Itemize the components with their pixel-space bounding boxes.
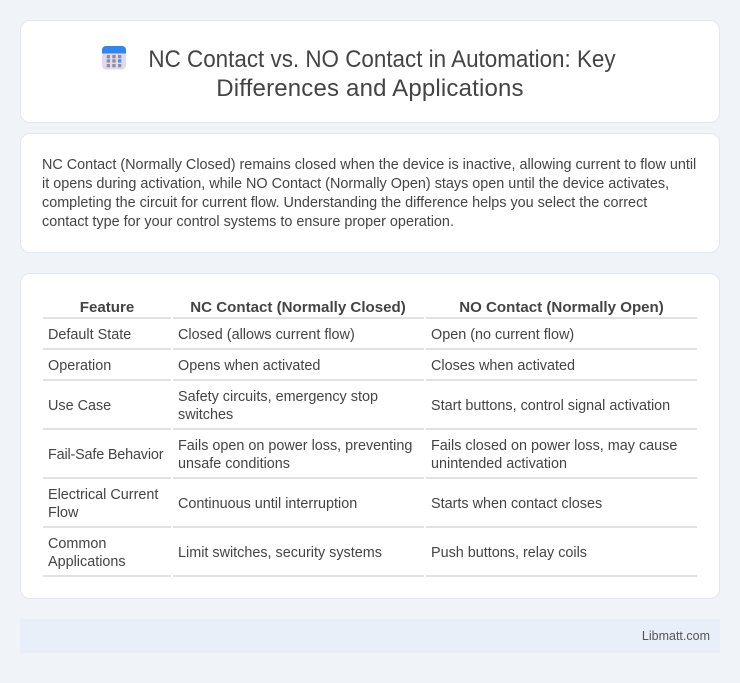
comparison table: Operation <box>48 358 111 374</box>
row: electrical current flow <box>48 487 602 521</box>
intro text: it opens during activation, while NO Contact (Normally Open) stays open until the device activates, <box>42 176 669 192</box>
comparison table: Common <box>48 536 106 552</box>
comparison table: Fail-Safe Behavior <box>48 447 163 463</box>
footer text: Libmatt.com <box>642 629 710 643</box>
intro card <box>20 133 720 253</box>
comparison table: Flow <box>48 505 78 521</box>
comparison table: Safety circuits, emergency stop <box>178 389 378 405</box>
intro text: completing the circuit for current flow. Understanding the difference helps you select the correct <box>42 195 647 211</box>
comparison table: Default State <box>48 327 131 343</box>
comparison table: Feature <box>80 298 134 316</box>
row: operation <box>48 358 575 374</box>
title: NC Contact vs. NO Contact in Automation: Key <box>148 46 615 73</box>
comparison table: Push buttons, relay coils <box>431 545 587 561</box>
row: fail-safe behavior <box>48 438 677 472</box>
comparison table: switches <box>178 407 233 423</box>
title card <box>20 20 720 123</box>
icon: calendar grid <box>102 46 126 70</box>
row: common applications <box>48 536 587 570</box>
comparison table: NO Contact (Normally Open) <box>459 298 664 316</box>
comparison table: Closes when activated <box>431 358 575 374</box>
comparison table: Electrical Current <box>48 487 158 503</box>
table card <box>20 273 720 599</box>
title: Differences and Applications <box>216 75 524 102</box>
table header <box>80 298 664 316</box>
comparison table: Start buttons, control signal activation <box>431 398 670 414</box>
comparison table: NC Contact (Normally Closed) <box>190 298 406 316</box>
comparison table: unsafe conditions <box>178 456 290 472</box>
title <box>148 46 616 102</box>
comparison table: Fails closed on power loss, may cause <box>431 438 677 454</box>
row: default state <box>48 327 574 343</box>
comparison table: Use Case <box>48 398 111 414</box>
footer bar <box>20 619 720 653</box>
intro text <box>42 157 696 230</box>
comparison table: Opens when activated <box>178 358 320 374</box>
comparison table: Applications <box>48 554 126 570</box>
comparison table: Starts when contact closes <box>431 496 602 512</box>
comparison table: Limit switches, security systems <box>178 545 382 561</box>
comparison table: Open (no current flow) <box>431 327 574 343</box>
intro text: contact type for your control systems to ensure proper operation. <box>42 214 454 230</box>
comparison table: unintended activation <box>431 456 567 472</box>
comparison table: Closed (allows current flow) <box>178 327 355 343</box>
comparison table: Continuous until interruption <box>178 496 357 512</box>
intro text: NC Contact (Normally Closed) remains closed when the device is inactive, allowing current to flow until <box>42 157 696 173</box>
row: use case <box>48 389 670 423</box>
comparison table: Fails open on power loss, preventing <box>178 438 412 454</box>
